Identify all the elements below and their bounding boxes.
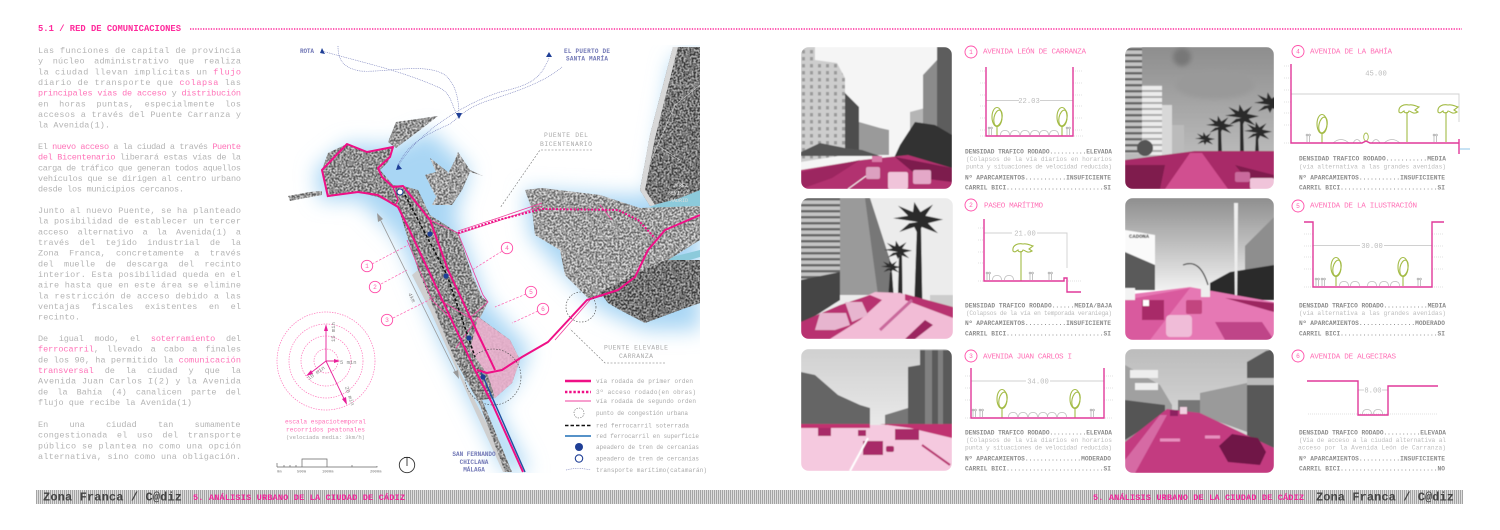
text block: introduction: principales vías de acceso y distribución (38, 89, 241, 99)
panel: Avenida Juan Carlos I title (965, 350, 1072, 362)
text block: Avenida de Algeciras data: (Vía de acceso a la ciudad alternativa al (1299, 437, 1446, 444)
text block: introduction: de los 90, ha permitido la comunicación (38, 355, 241, 365)
text block: introduction: Las funciones de capital de provincia (38, 46, 241, 56)
text block: Avenida Juan Carlos I data: (Colapsos de la vía diarios en horarios (966, 437, 1112, 444)
text block: introduction: Zona Franca, concretamente a través (38, 249, 241, 259)
text block: Avenida León de Carranza data: punta y situaciones de velocidad reducida) (966, 164, 1112, 170)
text block: Avenida Juan Carlos I data (965, 430, 1112, 472)
caption: pedestrian scale (285, 418, 366, 441)
text block: introduction: público se plantea no como una opción (38, 441, 241, 451)
text block: Paseo Marítimo data (965, 302, 1112, 338)
text block: introduction: alternativa, sino como una obligación. (38, 452, 241, 462)
map: destination label San Fernando Chiclana Málaga: MÁLAGA (463, 466, 485, 474)
chart: pedestrian time scale: 10 min (306, 365, 326, 382)
chart: cross section Avenida León de Carranza (980, 67, 1084, 136)
graphic scale bar (277, 459, 382, 474)
map: label Puente del Bicentenario (500, 132, 592, 208)
panel: Avenida de la Bahía title (1292, 46, 1392, 58)
map: destination label San Fernando Chiclana Málaga: CHICLANA (460, 459, 489, 466)
text block: Avenida de la Bahía data (1299, 156, 1446, 192)
map: numbered markers (361, 242, 549, 326)
chart: pedestrian time scale: 5 min (340, 359, 357, 366)
map: numbered markers: 4 (505, 245, 509, 252)
text block: introduction: carga de tráfico que generan todos aquellos (38, 163, 241, 173)
graphic scale bar: 0m (277, 470, 282, 474)
map: maritime routes (320, 46, 562, 170)
text block: Avenida de Algeciras data: DENSIDAD TRAFICO RODADO..........ELEVADA (1299, 430, 1446, 436)
map: numbered markers: 6 (541, 306, 545, 313)
text block: introduction: la Avenida(1). (38, 121, 110, 131)
map: railway (405, 195, 525, 472)
text block: Avenida León de Carranza data (965, 148, 1112, 192)
text block: Avenida de la Bahía data: (vía alternativa a las grandes avenidas) (1299, 164, 1446, 170)
panel: Avenida León de Carranza photo (801, 47, 952, 189)
legend: punto de congestión urbana (596, 410, 688, 417)
text block: introduction: El nuevo acceso a la ciudad a través Puente (38, 142, 241, 152)
map: label Jerez Sevilla Madrid (668, 184, 689, 202)
map: beach edge of mainland (640, 47, 678, 206)
graphic scale bar: 1000m (322, 470, 334, 474)
panel: Paseo Marítimo title: PASEO MARÍTIMO (984, 202, 1043, 210)
footer: right chapter: 5. ANÁLISIS URBANO DE LA CIUDAD DE CÁDIZ (1093, 492, 1304, 503)
legend: vía rodada de primer orden (596, 378, 693, 385)
text block: Avenida León de Carranza data: DENSIDAD TRAFICO RODADO..........ELEVADA (965, 148, 1112, 156)
map: label Puente Elevable Carranza: PUENTE ELEVABLE (604, 344, 668, 352)
legend: vía rodada de segundo orden (596, 398, 696, 405)
legend: red ferrocarril en superficie (596, 433, 699, 440)
text block: Avenida de Algeciras data: CARRIL BICI..........................NO (1299, 466, 1445, 472)
text block: Avenida de la Bahía data: Nº APARCAMIENTOS...........INSUFICIENTE (1299, 174, 1445, 182)
map: numbered markers: 1 (365, 263, 369, 270)
text block: introduction: En una ciudad tan sumamente (38, 420, 241, 430)
icon: north arrow (399, 457, 415, 473)
text block: introduction: transversal de la ciudad y que la (38, 366, 241, 376)
panel: Avenida de la Ilustración title (1292, 200, 1417, 212)
map: blue sea glow (315, 47, 700, 472)
text block: introduction: vehículos que se dirigen al centro urbano (38, 174, 241, 184)
map: route label El Puerto de Santa María: SANTA MARÍA (566, 56, 608, 62)
chart: cross section Avenida de la Ilustración (1304, 222, 1444, 287)
text block: Paseo Marítimo data: Nº APARCAMIENTOS...........INSUFICIENTE (965, 320, 1111, 327)
text block: Avenida de la Ilustración data: (vía alternativa a las grandes avenidas) (1299, 310, 1446, 317)
caption: pedestrian scale: recorridos peatonales (286, 426, 365, 434)
text block: introduction: través del tejido industrial de la (38, 238, 241, 248)
map: secondary roads (407, 203, 612, 370)
legend: transporte marítimo(catamarán) (596, 467, 707, 474)
text block: introduction (38, 46, 241, 462)
text block: Avenida León de Carranza data: CARRIL BICI..........................SI (965, 184, 1111, 192)
text block: Avenida de la Bahía data: CARRIL BICI..........................SI (1299, 184, 1445, 192)
text block: introduction: interior. Esta posibilidad queda en el (38, 270, 241, 280)
text block: introduction: en horas puntas, especialmente los (38, 99, 241, 109)
text block: introduction: del muelle de descarga del recinto (38, 259, 241, 269)
chart: cross section Avenida de la Bahía (1284, 64, 1470, 154)
text block: introduction: ventajas fiscales existentes en el (38, 302, 241, 312)
text block: Paseo Marítimo data: DENSIDAD TRAFICO RODADO......MEDIA/BAJA (965, 302, 1112, 310)
map: callout lines (372, 245, 538, 323)
map: aerial land masses (288, 47, 700, 472)
panel: Avenida de la Bahía photo (1125, 47, 1286, 189)
text block: Avenida Juan Carlos I data: DENSIDAD TRAFICO RODADO..........ELEVADA (965, 430, 1112, 436)
map: label Puente Elevable Carranza: CARRANZA (619, 353, 653, 360)
map: third access under construction (458, 209, 655, 238)
map: label Puente del Bicentenario: PUENTE DEL (544, 132, 588, 139)
map: numbered markers: 5 (529, 289, 533, 296)
panel: Avenida de la Ilustración title: AVENIDA DE LA ILUSTRACIÓN (1310, 200, 1417, 210)
text block: Avenida de la Ilustración data: DENSIDAD TRAFICO RODADO............MEDIA (1299, 302, 1446, 310)
footer: left title: Zona Franca / C@diz (43, 490, 182, 504)
text block: Avenida de Algeciras data: Nº APARCAMIENTOS...........INSUFICIENTE (1299, 456, 1445, 462)
chart: cross section Avenida Juan Carlos I (965, 368, 1114, 418)
legend: apeadero de tren de cercanías (596, 456, 699, 462)
footer: left chapter: 5. ANÁLISIS URBANO DE LA CIUDAD DE CÁDIZ (193, 492, 405, 503)
text block: introduction: De igual modo, el soterramiento del (38, 334, 241, 344)
text block: Avenida de la Ilustración data (1299, 302, 1446, 338)
map: congestion points (465, 292, 596, 405)
map: label Jerez Sevilla Madrid: MADRID (670, 198, 688, 204)
text block: Avenida de la Bahía data: DENSIDAD TRAFICO RODADO...........MEDIA (1299, 156, 1446, 162)
text block: introduction: accesos a través del Puente Carranza y (38, 110, 241, 120)
panel: Avenida León de Carranza title: 1 (969, 49, 973, 56)
chart: cross section Avenida de la Ilustración: 30.00 (1361, 243, 1383, 251)
map: distance arrow: 4km (406, 292, 417, 304)
legend: red ferrocarril soterrada (596, 422, 689, 430)
caption: pedestrian scale: escala espaciotemporal (285, 418, 366, 426)
text block: introduction: Avenida Juan Carlos I(2) y la Avenida (38, 377, 241, 387)
chart: cross section Avenida de la Bahía: 45.00 (1365, 70, 1387, 78)
chart: cross section Paseo Marítimo: 21.00 (1014, 230, 1036, 238)
chart: cross section Avenida de Algeciras: 8.00 (1364, 388, 1382, 396)
map: distance arrow (377, 213, 459, 379)
text block: Avenida Juan Carlos I data: punta y situaciones de velocidad reducida) (965, 444, 1112, 452)
map: stations (397, 189, 486, 380)
map: label Jerez Sevilla Madrid: SEVILLA (668, 190, 689, 196)
map: route label Rota: ROTA (300, 48, 314, 55)
text block: introduction: de la Bahía (4) canalicen parte del (38, 387, 241, 397)
section heading: 5.1 / RED DE COMUNICACIONES (38, 24, 181, 34)
legend: apeadero de tren de cercanías (596, 444, 699, 451)
chart: pedestrian time scale: 20 min (343, 385, 356, 406)
text block: introduction: flujo que recibe la Avenida(1) (38, 398, 192, 408)
panel: Avenida León de Carranza title: AVENIDA LEÓN DE CARRANZA (983, 46, 1086, 56)
text block: introduction: la restricción de acceso debido a las (38, 291, 241, 301)
chart: cross section Paseo Marítimo (978, 219, 1081, 292)
map: congestion district tint (470, 317, 520, 398)
map: first order roads (322, 144, 700, 472)
text block: Paseo Marítimo data: CARRIL BICI..........................SI (965, 330, 1111, 338)
panel: Avenida de Algeciras title: AVENIDA DE ALGECIRAS (1310, 354, 1396, 362)
map: route label El Puerto de Santa María: EL PUERTO DE (564, 48, 610, 55)
map: communications network of Cádiz (288, 46, 700, 474)
map: numbered markers: 3 (385, 317, 389, 324)
graphic scale bar: 500m (297, 470, 307, 474)
map: bay channels (650, 190, 700, 260)
map: route label El Puerto de Santa María (564, 48, 610, 60)
text block: Avenida de la Ilustración data: CARRIL BICI..........................SI (1299, 330, 1445, 338)
chart: cross section Avenida Juan Carlos I: 34.00 (1027, 378, 1049, 386)
text block: Avenida de Algeciras data (1298, 430, 1446, 472)
text block: Avenida León de Carranza data: Nº APARCAMIENTOS...........INSUFICIENTE (965, 174, 1111, 182)
text block: introduction: desde los municipios cercanos. (38, 185, 184, 195)
map: numbered markers: 2 (373, 284, 377, 291)
text block: Avenida de la Ilustración data: Nº APARCAMIENTOS...............MODERADO (1299, 320, 1445, 327)
map: label Puente Elevable Carranza (570, 329, 668, 363)
text block: introduction: la ciudad llevan implícitas un flujo (38, 67, 241, 77)
text block: introduction: acceso alternativo a la Avenida(1) a (38, 227, 241, 237)
text block: introduction: Junto al nuevo Puente, se ha planteado (38, 206, 241, 216)
footer: right title: Zona Franca / C@diz (1316, 490, 1454, 504)
text block: introduction: recinto. (38, 313, 80, 323)
map: destination label San Fernando Chiclana Málaga: SAN FERNANDO (452, 451, 496, 458)
panel: Avenida de Algeciras title (1292, 350, 1396, 362)
text block: introduction: del Bicentenario liberará estas vías de la (38, 153, 241, 163)
panel: Avenida de Algeciras title: 6 (1296, 353, 1300, 360)
text block: introduction: la posibilidad de establecer un tercer (38, 217, 241, 227)
legend (565, 378, 707, 474)
panel: Avenida de la Ilustración title: 5 (1296, 203, 1300, 210)
text block: Avenida Juan Carlos I data: CARRIL BICI..........................SI (965, 466, 1111, 472)
panel: Avenida León de Carranza title (965, 46, 1086, 58)
panel: Paseo Marítimo title (965, 199, 1043, 211)
graphic scale bar: 2000m (370, 470, 382, 474)
chart: cross section Avenida de Algeciras (1307, 381, 1438, 415)
text block: introduction: ferrocarril, llevado a cabo a finales (38, 345, 241, 355)
text block: introduction: diario de transporte que colapsa las (38, 78, 241, 88)
chart: pedestrian time scale: 15 min (330, 322, 337, 342)
panel: Avenida de la Bahía title: AVENIDA DE LA BAHÍA (1310, 48, 1392, 56)
map: label Puente del Bicentenario: BICENTENARIO (540, 141, 592, 148)
legend: 3º acceso rodado(en obras) (596, 389, 696, 396)
panel: Avenida de la Ilustración photo: CADONA (1129, 233, 1150, 240)
text block: Avenida León de Carranza data: (Colapsos de la vía diarios en horarios (966, 156, 1112, 163)
text block: introduction: congestionada el uso del transporte (38, 431, 241, 441)
panel: Avenida de Algeciras photo (1125, 349, 1274, 473)
panel: Avenida de la Bahía title: 4 (1296, 49, 1300, 56)
chart: pedestrian time scale (277, 312, 375, 410)
map: label Jerez Sevilla Madrid: JEREZ (673, 183, 688, 189)
chart: cross section Avenida León de Carranza: 22.03 (1018, 98, 1040, 106)
footer band (36, 490, 1463, 504)
panel: Paseo Marítimo photo (801, 198, 953, 339)
text block: Avenida Juan Carlos I data: Nº APARCAMIENTOS...............MODERADO (965, 456, 1111, 462)
panel: Paseo Marítimo title: 2 (969, 202, 973, 209)
panel: Avenida de la Ilustración photo (1125, 198, 1274, 340)
panel: Avenida Juan Carlos I title: 3 (969, 353, 973, 360)
panel: Avenida Juan Carlos I photo (801, 349, 952, 471)
text block: introduction: aire hasta que en este área se elimine (38, 281, 241, 291)
text block: Avenida de Algeciras data: acceso por la Avenida León de Carranza) (1298, 444, 1446, 452)
text block: Paseo Marítimo data: (Colapsos de la vía en temporada veraniega) (966, 310, 1112, 317)
text block: introduction: y núcleo administrativo que realiza (38, 57, 241, 67)
map: destination label San Fernando Chiclana Málaga (452, 452, 496, 472)
panel: Avenida Juan Carlos I title: AVENIDA JUAN CARLOS I (983, 354, 1072, 362)
caption: pedestrian scale: (velociada media: 3km/h) (286, 434, 365, 441)
map: sandy west coast (412, 270, 512, 472)
